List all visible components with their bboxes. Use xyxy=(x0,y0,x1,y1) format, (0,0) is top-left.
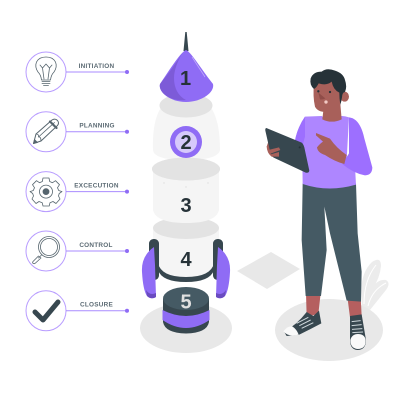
icon: pencil xyxy=(34,119,58,144)
neck xyxy=(322,100,342,122)
upper body xyxy=(265,116,372,188)
icon: check mark xyxy=(35,302,58,320)
step: control: CONTROL xyxy=(79,242,113,249)
section 1: nose cone xyxy=(160,32,213,102)
trousers xyxy=(302,183,362,302)
step: closure xyxy=(26,291,129,331)
shoes and socks xyxy=(283,293,366,350)
step: execution: EXCECUTION xyxy=(74,182,119,190)
plant xyxy=(361,260,388,310)
person ground shadow xyxy=(275,299,383,361)
mouth xyxy=(324,100,328,104)
step: execution xyxy=(26,172,129,212)
rocket ground shadow xyxy=(140,303,232,353)
sleeve xyxy=(342,117,372,175)
icon: gear xyxy=(30,178,62,206)
section 2 xyxy=(152,94,220,180)
right fin xyxy=(213,239,230,298)
eyes xyxy=(317,90,331,93)
step: initiation xyxy=(26,52,129,92)
section 3 xyxy=(152,158,220,223)
section 5: base: 5 xyxy=(180,292,192,314)
section 1: nose cone: 1 xyxy=(180,68,191,90)
rocket xyxy=(142,32,230,334)
step: planning xyxy=(26,112,129,152)
person xyxy=(265,69,372,350)
left fin xyxy=(142,239,159,298)
left hand xyxy=(267,142,280,157)
tablet xyxy=(265,128,309,173)
left shoe xyxy=(283,311,321,336)
fingers xyxy=(268,147,280,157)
step: control xyxy=(26,231,129,271)
step: initiation: INITIATION xyxy=(79,63,115,70)
step: planning: PLANNING xyxy=(79,122,115,130)
right shoe xyxy=(350,314,366,350)
step list xyxy=(26,52,129,331)
shirt xyxy=(294,116,356,188)
section 5: base xyxy=(162,287,210,334)
icon: magnifier xyxy=(33,236,60,264)
nose xyxy=(318,93,325,100)
shirt side shade xyxy=(294,117,305,155)
face xyxy=(314,80,343,112)
ear xyxy=(340,92,349,102)
section 3: 3 xyxy=(180,195,192,217)
hair xyxy=(310,69,346,105)
tablet camera xyxy=(299,146,301,148)
step: closure: CLOSURE xyxy=(80,302,113,308)
icon: light bulb xyxy=(36,57,56,86)
socks xyxy=(306,293,362,317)
pointing hand xyxy=(316,133,347,164)
section 4 xyxy=(153,217,219,282)
floor diamond xyxy=(237,252,300,289)
section 4: 4 xyxy=(180,249,192,271)
head xyxy=(310,69,349,122)
section 2: 2 xyxy=(180,132,192,154)
